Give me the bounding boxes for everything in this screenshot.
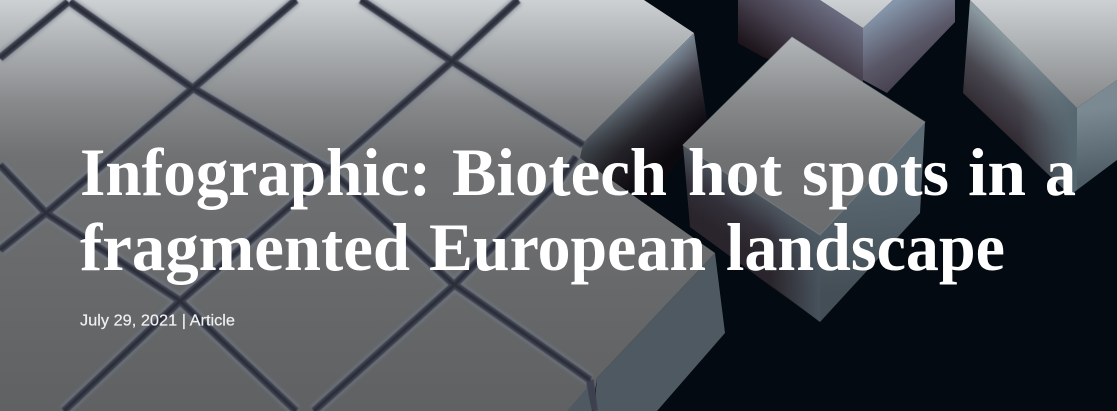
title: spots — [802, 134, 949, 210]
title: fragmented — [80, 209, 410, 285]
cube: lower block side — [594, 253, 725, 411]
date and article type: July 29, 2021 | Article — [80, 312, 235, 330]
cube: centre — [683, 37, 925, 322]
title — [80, 134, 1076, 285]
title: European — [429, 209, 706, 285]
title: Infographic: — [80, 134, 431, 210]
cube: top middle — [738, 0, 955, 95]
tile surface — [0, 0, 715, 411]
cube: top right — [963, 0, 1117, 195]
title: in — [968, 134, 1026, 210]
grid channels — [0, 0, 594, 411]
title: a — [1045, 134, 1076, 210]
cube: raised block side — [575, 33, 707, 200]
lower cell side — [567, 388, 592, 411]
title: landscape — [726, 209, 1005, 285]
title: Biotech — [452, 134, 667, 210]
title: hot — [688, 134, 782, 210]
